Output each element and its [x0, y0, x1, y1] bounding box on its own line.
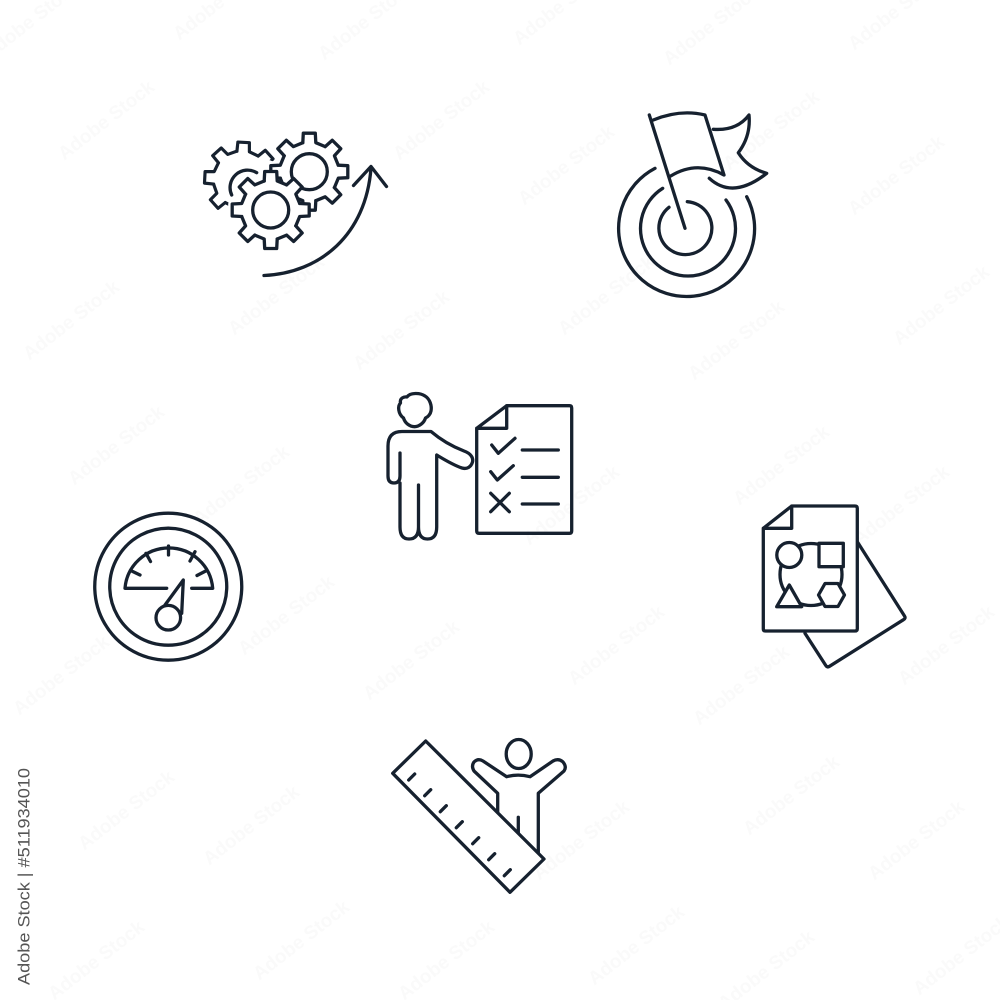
- front flag: [653, 113, 724, 176]
- icon: gauge: [95, 513, 242, 660]
- person head: [399, 393, 431, 427]
- watermark pattern: Adobe Stock: [519, 461, 624, 550]
- person head: [506, 740, 531, 768]
- watermark pattern: Adobe Stock: [54, 76, 159, 165]
- watermark pattern: Adobe Stock: [514, 121, 619, 210]
- watermark pattern: Adobe Stock: [9, 631, 114, 720]
- watermark pattern: Adobe Stock: [584, 901, 689, 990]
- icon: flag on target: [619, 113, 767, 297]
- watermark pattern: Adobe Stock: [74, 766, 179, 855]
- gauge rings: [95, 513, 242, 660]
- watermark pattern: Adobe Stock: [689, 641, 794, 730]
- right gear: [271, 133, 348, 210]
- icon: person presenting checklist: [388, 393, 572, 539]
- ruler ticks: [409, 774, 510, 876]
- gauge dial: [125, 548, 213, 588]
- watermark pattern: Adobe Stock: [684, 296, 789, 385]
- watermark pattern: Adobe Stock: [844, 131, 949, 220]
- back left gear inner arc: [230, 170, 257, 195]
- back sheet: [805, 542, 905, 667]
- watermark pattern: Adobe Stock: [199, 781, 304, 870]
- checklist document: [477, 406, 572, 533]
- watermark pattern: Adobe Stock: [224, 251, 329, 340]
- icon: gears with rising arrow: [203, 133, 386, 276]
- watermark pattern: Adobe Stock: [64, 401, 169, 490]
- watermark pattern: Adobe Stock: [889, 261, 994, 350]
- watermark pattern: Adobe Stock: [849, 461, 954, 550]
- back flag: [709, 115, 767, 188]
- hexagon shape: [818, 584, 844, 606]
- watermark pattern: Adobe Stock: [739, 751, 844, 840]
- watermark pattern: Adobe Stock: [529, 796, 634, 885]
- target rings: [619, 168, 755, 297]
- triangle shape: [777, 585, 802, 607]
- watermark pattern: Adobe Stock: [719, 86, 824, 175]
- watermark pattern: Adobe Stock: [389, 76, 494, 165]
- check marks and cross: [491, 438, 515, 512]
- needle hub: [156, 605, 181, 630]
- person body: [388, 432, 473, 539]
- watermark pattern: Adobe Stock: [189, 441, 294, 530]
- watermark pattern: Adobe Stock: [234, 571, 339, 660]
- stock credit text: Adobe Stock | #511934010: [14, 768, 34, 985]
- watermark pattern: Adobe Stock: [894, 601, 999, 690]
- gear separation halos: [232, 133, 348, 248]
- watermark pattern: Adobe Stock: [249, 896, 354, 985]
- gauge ticks: [132, 546, 206, 576]
- checklist lines: [522, 450, 558, 504]
- gauge needle: [165, 580, 183, 613]
- flag pole: [649, 115, 685, 228]
- person body: [472, 760, 565, 853]
- icon: person and ruler: [393, 740, 565, 892]
- front gear: [232, 172, 309, 248]
- watermark pattern: Adobe Stock: [554, 251, 659, 340]
- gap patch between gears: [261, 160, 275, 174]
- icon: documents with shapes: [763, 506, 905, 667]
- ruler: [393, 741, 544, 892]
- rising arrow: [264, 166, 386, 276]
- watermark pattern: Adobe Stock: [564, 601, 669, 690]
- watermark pattern: Adobe Stock: [729, 421, 834, 510]
- circle shape: [777, 542, 802, 568]
- connector ring: [780, 544, 842, 606]
- watermark pattern: Adobe Stock: [864, 796, 969, 885]
- watermark pattern: Adobe Stock: [349, 286, 454, 375]
- front document: [763, 506, 857, 631]
- square shape: [819, 543, 843, 567]
- watermark pattern: Adobe Stock: [19, 276, 124, 365]
- watermark pattern: Adobe Stock: [359, 616, 464, 705]
- back left gear: [203, 140, 281, 218]
